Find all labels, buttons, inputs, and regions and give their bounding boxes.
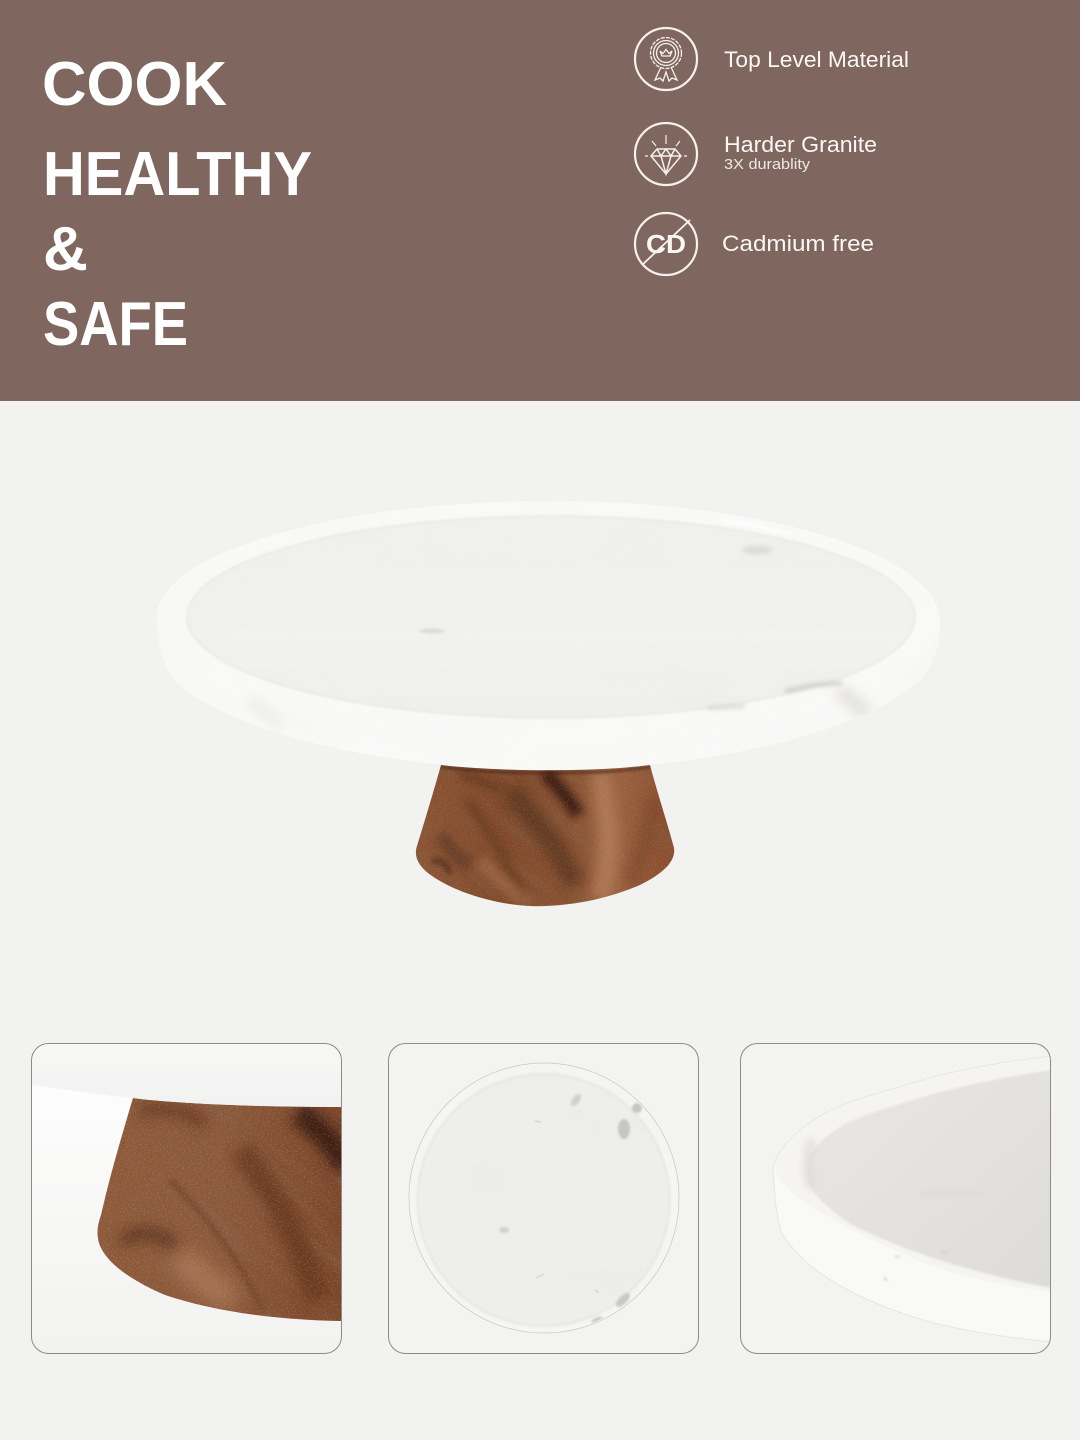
- rim top shade: [774, 1057, 1052, 1292]
- label: Top Level Material: [724, 47, 909, 72]
- inner basin: [808, 1070, 1052, 1288]
- feature: top level material: [635, 28, 909, 90]
- feature: harder granite: [635, 123, 877, 185]
- thumbnail: top view of plate: [388, 1044, 698, 1354]
- marble disc: [409, 1063, 679, 1333]
- title: SAFE: [43, 290, 188, 359]
- label: Cadmium free: [722, 231, 874, 256]
- header banner: [0, 0, 1080, 401]
- title: &: [43, 215, 88, 284]
- marble veining: [254, 545, 871, 722]
- feature: cadmium free: [635, 213, 874, 275]
- title: [42, 50, 312, 359]
- plate edge: [773, 1056, 1052, 1342]
- marble edge: [31, 1043, 342, 1107]
- wood base detail: [98, 1098, 341, 1321]
- icon: award rosette: [635, 28, 697, 90]
- wooden pedestal: [416, 765, 674, 906]
- sublabel: 3X durablity: [724, 157, 811, 173]
- thumbnail: rim close-up: [740, 1044, 1052, 1354]
- title: HEALTHY: [43, 140, 312, 209]
- main product: marble cake stand: [326, 506, 932, 906]
- icon: diamond: [635, 123, 697, 185]
- inner basin: [187, 516, 915, 718]
- title: COOK: [42, 50, 227, 119]
- rim top: [157, 501, 940, 745]
- thumbnail: pedestal close-up: [31, 1043, 342, 1354]
- label: Harder Granite: [724, 132, 877, 157]
- marble plate: [326, 506, 932, 770]
- icon: no cadmium: CD: [646, 229, 686, 259]
- icon: no cadmium: [635, 213, 697, 275]
